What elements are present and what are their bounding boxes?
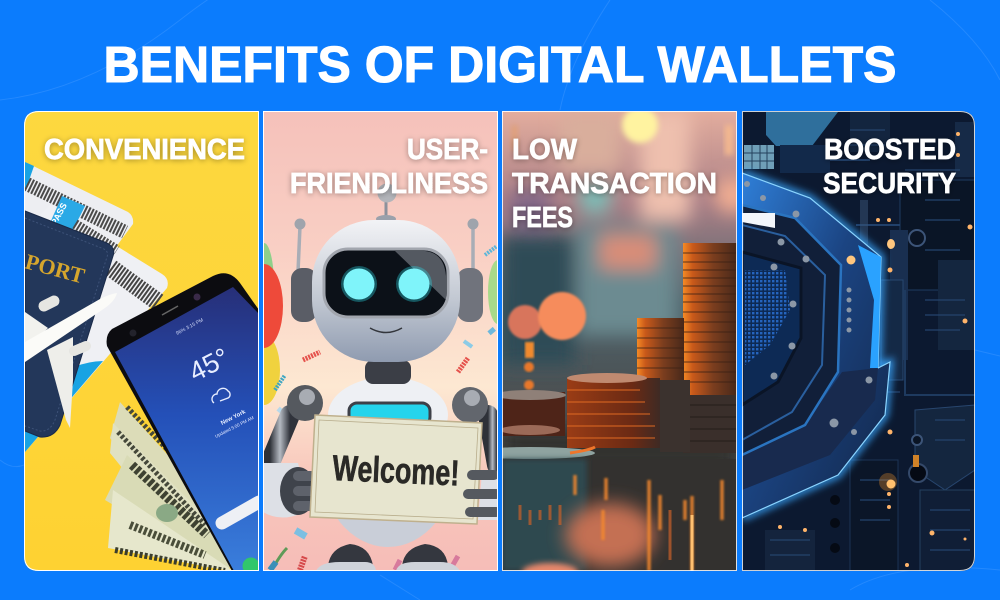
shield outer frame: [742, 173, 890, 518]
table reflection with orange streaks: [502, 459, 737, 581]
label: boosted security: [823, 134, 956, 200]
robot: right hand: [468, 472, 498, 520]
shield dark lower band: [742, 368, 878, 490]
robot: visor: [324, 249, 448, 317]
label: low transaction fees: TRANSACTION: [512, 168, 717, 200]
panel: low transaction fees: [502, 111, 737, 571]
robot: head: [312, 220, 460, 362]
icon: front boarding pass: PASS: [49, 201, 69, 227]
panel: convenience: [23, 111, 260, 574]
circuit board details: [744, 112, 975, 571]
robot: body: [328, 380, 448, 547]
icon: back boarding pass: [25, 162, 133, 255]
icon: toy airplane: [25, 293, 117, 428]
icon: front boarding pass: [25, 196, 168, 452]
shield outer glow: [742, 173, 890, 518]
panel: user-friendliness: [263, 111, 498, 571]
welcome sign: Welcome!: [332, 447, 460, 494]
icon: smartphone: Updated 5:00 PM AM: [214, 415, 255, 439]
bokeh lights: [508, 107, 733, 390]
orange lights: [778, 132, 972, 567]
robot: legs: [316, 544, 460, 571]
shield cyan edge: [858, 245, 881, 368]
robot: smile: [370, 328, 402, 332]
icon: smartphone: [107, 273, 260, 574]
shield inner ring highlight: [742, 225, 825, 440]
robot: eyes: [341, 266, 432, 302]
welcome sign: [310, 415, 482, 524]
label: user-friendliness: [290, 134, 488, 200]
label: low transaction fees: [512, 134, 717, 234]
label: boosted security: BOOSTED: [824, 134, 956, 166]
icon: passport: [23, 211, 114, 437]
label: low transaction fees: FEES: [512, 202, 573, 234]
icon: passport: PORT: [23, 249, 88, 289]
title: BENEFITS OF DIGITAL WALLETS: [104, 36, 896, 93]
confetti: [270, 246, 497, 570]
icon: dollar bills: [105, 402, 240, 572]
robot: neck: [365, 360, 411, 384]
icon: balloons: [264, 243, 497, 405]
panel: boosted security: [742, 111, 975, 571]
icon: smartphone: 96% 3:15 PM: [175, 317, 204, 337]
label: user-friendliness: USER-: [407, 134, 488, 166]
icon: smartphone: 45°: [184, 342, 234, 387]
robot: arms and shoulders: [270, 385, 497, 465]
shield inner ring: [742, 205, 841, 455]
shield rivets: [744, 181, 872, 435]
robot: left hand: [264, 463, 312, 518]
label: low transaction fees: LOW: [512, 134, 578, 166]
blurred city background: [503, 112, 737, 459]
robot: side antennas and ear cups: [291, 218, 483, 322]
label: user-friendliness: FRIENDLINESS: [290, 168, 488, 200]
shield inner screen: [742, 213, 801, 405]
icon: smartphone: New York: [220, 409, 247, 427]
coin stacks: [502, 243, 737, 459]
label: convenience: CONVENIENCE: [44, 134, 245, 166]
robot: top antenna: [376, 184, 396, 223]
label: boosted security: SECURITY: [823, 168, 956, 200]
